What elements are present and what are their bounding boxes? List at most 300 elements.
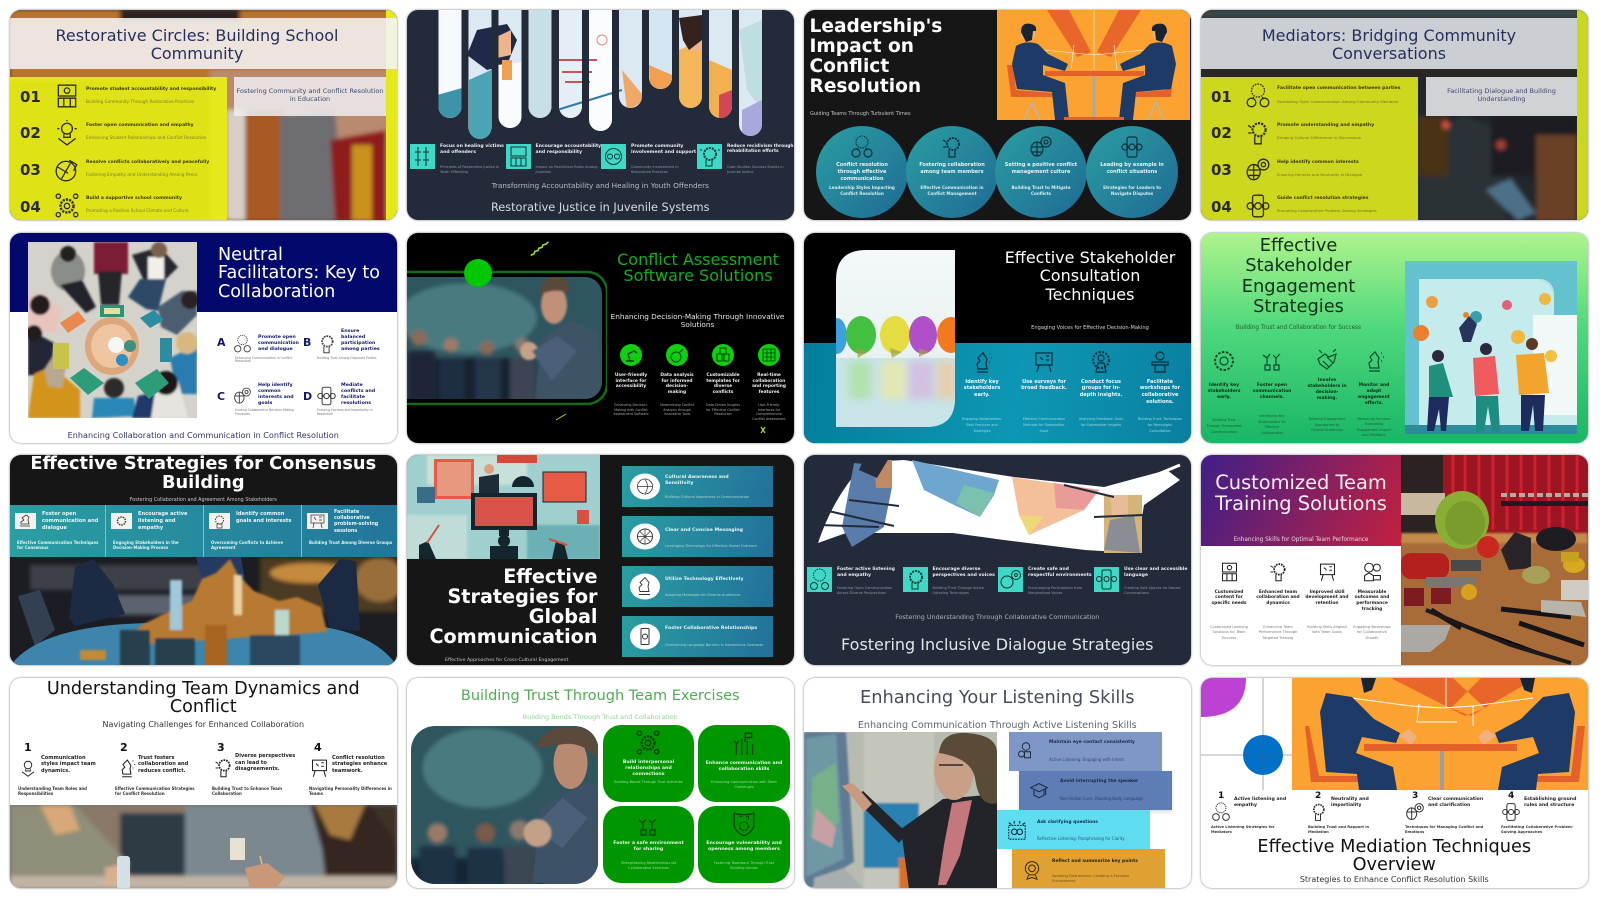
- item C: interests and: [258, 395, 294, 400]
- box: reflect and summarize: [1012, 848, 1165, 888]
- item D: Resolution: [317, 412, 333, 416]
- column: real-time: and reporting: [752, 384, 786, 389]
- item A: communication: [258, 341, 299, 346]
- image: man with phone and digital icons: [1201, 10, 1588, 220]
- icon: plants: [635, 814, 661, 838]
- item 3: [212, 740, 302, 798]
- icon: person with headset: [1017, 738, 1035, 762]
- column: interface: accessibility: [616, 384, 646, 389]
- box: eye contact: [1009, 732, 1162, 770]
- item: problem-solving: [302, 505, 397, 557]
- subtitle: Building Bonds Through Trust and Collaboration: [523, 712, 678, 720]
- column: real-time: Comprehensive: [756, 412, 782, 416]
- card: vulnerability: [698, 806, 790, 882]
- image: negotiators at a table: [997, 10, 1190, 120]
- title: Resolution: [810, 76, 921, 96]
- box: reflect and summarize: Avoiding Distractions: Creating a Focused: [1052, 874, 1129, 878]
- card: cultural awareness: Cultural Awareness and: [665, 474, 729, 480]
- column: surveys: broad feedback.: [1021, 385, 1067, 391]
- card: technology: [622, 566, 773, 607]
- image: colleagues at a meeting table: [10, 804, 397, 888]
- decoration: lime zigzag: [529, 240, 555, 256]
- column: interface: Enhancing Decision-: [614, 403, 648, 407]
- column: content: content for: [1215, 595, 1243, 600]
- column: channels: Collaboration: [1261, 430, 1283, 434]
- card: interpersonal: Build interpersonal: [623, 760, 674, 764]
- item: accountability: Encourage accountability: [536, 144, 601, 149]
- item 04: 04: [1211, 198, 1232, 216]
- image: colourful speech bubbles: [836, 250, 955, 427]
- icon: brain target: [1246, 158, 1270, 180]
- decoration: lime cross: [759, 426, 767, 434]
- item 1: dynamics.: [41, 768, 70, 774]
- item 03: 03: [20, 161, 41, 179]
- icon: green circle bomb: [666, 344, 688, 366]
- column: data: Streamlining Conflict: [660, 403, 694, 407]
- item 1: empathy: [1234, 803, 1257, 808]
- item: safe environments: Encouraging Participation from: [1028, 586, 1082, 590]
- box: clarifying questions: [997, 810, 1150, 848]
- yellow list panel: [1201, 77, 1418, 221]
- card: safe environment: Foster a safe environment: [613, 841, 684, 846]
- item B: participation: [341, 341, 375, 346]
- panel: Listening Skills: [804, 678, 1190, 888]
- item 1: 1: [1218, 790, 1224, 800]
- title: Techniques: [1046, 285, 1134, 304]
- item 2: 2: [1315, 790, 1321, 800]
- column: skills: with Team Goals: [1312, 630, 1342, 634]
- icon: green circle grid: [758, 344, 780, 366]
- item: active listening: Across Diverse Perspectives: [837, 590, 886, 594]
- item 2: Mediation: [1308, 830, 1329, 834]
- title: [810, 16, 942, 96]
- item 02: [20, 120, 206, 146]
- item C: goals: [258, 401, 272, 406]
- subtitle card: [234, 77, 386, 116]
- title: Engagement: [1242, 276, 1355, 296]
- item: open communication: [10, 505, 106, 557]
- item: community: Community Involvement in: [631, 164, 678, 168]
- item B: B: [303, 336, 311, 348]
- icon: brain heads: [851, 135, 873, 158]
- item: open communication: communication and: [42, 518, 98, 524]
- icon: film board: [1006, 818, 1028, 842]
- column: data: Data analysis: [660, 373, 694, 378]
- circle: example: [1086, 126, 1178, 218]
- column: outcomes: tracking: [1362, 607, 1382, 612]
- circle: collaboration: Fostering collaboration: [919, 162, 985, 168]
- column: identify: Communication: [1211, 430, 1237, 434]
- icon: graduation cap: [1027, 780, 1051, 800]
- title: [1201, 838, 1588, 874]
- column: workshops: solutions.: [1146, 399, 1174, 405]
- item 04: Guide conflict resolution strategies: [1277, 196, 1368, 201]
- column: channels: channels.: [1260, 395, 1284, 400]
- column: collaboration: Targeted Training: [1263, 636, 1293, 640]
- teal lower band: [804, 342, 1191, 444]
- column: content: specific needs: [1211, 601, 1247, 606]
- item 4: 4: [1508, 790, 1514, 800]
- item C: Processes: [235, 412, 250, 416]
- item 3: disagreements.: [235, 766, 280, 772]
- title: [1201, 473, 1401, 515]
- item: open communication: dialogue: [42, 525, 67, 531]
- title: Conflict: [810, 56, 889, 76]
- item: active listening: Engaging Stakeholders in the: [113, 540, 179, 544]
- column: focus groups: groups for in-: [1082, 385, 1120, 391]
- title: Building Trust Through Team Exercises: [461, 688, 740, 704]
- item: community: Restorative Practices: [631, 170, 668, 174]
- image: training equipment on a wooden table: [1401, 455, 1588, 666]
- item: accountability: Impact on Recidivism Rates Among: [536, 164, 597, 168]
- card: safe environment: for sharing: [634, 847, 663, 852]
- column: workshops: [1132, 348, 1188, 436]
- title: Strategies for: [447, 584, 598, 608]
- item: common goals: [204, 505, 302, 557]
- item: accountability: Juveniles: [536, 170, 551, 174]
- column: real-time: features: [759, 390, 779, 394]
- item: open communication: Foster open: [42, 511, 76, 517]
- item 2: impartiality: [1331, 803, 1362, 808]
- title: Effective Mediation Techniques: [1257, 837, 1531, 857]
- column: data: decision-: [666, 384, 688, 389]
- column: channels: Identifying Key: [1259, 414, 1285, 418]
- item A: A: [217, 336, 226, 348]
- column: real-time: [746, 344, 792, 438]
- column: channels: communication: [1253, 389, 1291, 394]
- item 4: [309, 740, 397, 798]
- icon: gear head: [1268, 560, 1289, 584]
- subtitle card: Fostering Community and Conflict Resolution: [237, 87, 383, 95]
- subtitle: Fostering Understanding Through Collaborative Communication: [895, 613, 1099, 621]
- icon: speaker podium: [1148, 350, 1172, 374]
- panel: Stakeholder Engagement: [1201, 232, 1588, 442]
- column: outcomes: for Collaborative: [1357, 630, 1387, 634]
- card: interpersonal: connections: [632, 772, 665, 776]
- subtitle: Solutions: [681, 320, 714, 329]
- column: content: Solutions for Team: [1212, 630, 1246, 634]
- item 3: can lead to: [235, 760, 267, 766]
- item 03: Resolve conflicts collaboratively and peacefully: [86, 160, 209, 164]
- title: Community: [151, 44, 243, 63]
- item 02: Enhancing Student Relationships and Conflict Resolution: [86, 136, 206, 141]
- column: data: Analysis through: [663, 408, 691, 412]
- icon: gear head: [321, 335, 334, 354]
- item: open communication: Effective Communication Techniques: [17, 540, 98, 544]
- title: Restorative Justice in Juvenile Systems: [491, 200, 710, 214]
- item 4: 4: [314, 740, 322, 754]
- column: interface: Assessment Software: [613, 412, 649, 416]
- item 2: 2: [120, 740, 128, 754]
- subtitle card: [1426, 77, 1577, 116]
- item C: common: [258, 389, 281, 394]
- item: accessible language: language: [1124, 573, 1148, 578]
- title: Software Solutions: [623, 266, 773, 285]
- item 01: Building Community Through Restorative Practices: [86, 100, 194, 104]
- column: decision-making: Tailoring Engagement: [1309, 417, 1345, 421]
- icon: teal square gear head: [697, 144, 722, 169]
- item 2: Building Trust and Rapport in: [1308, 825, 1369, 829]
- circle: communication: [816, 126, 908, 218]
- title: Understanding Team Dynamics and: [47, 678, 360, 698]
- card: safe environment: Collaborative Exercises: [628, 866, 669, 870]
- item 01: [1211, 83, 1400, 108]
- item 04: [20, 193, 189, 218]
- icon: brain target: [1405, 800, 1425, 822]
- box: avoid interrupting: Avoid interrupting the speaker: [1060, 778, 1138, 784]
- item D: facilitate: [341, 395, 365, 400]
- item 3: and clarification: [1428, 803, 1470, 808]
- panel: Global Communication: [407, 455, 794, 665]
- subtitle: Enhancing Communication Through Active Listening Skills: [858, 720, 1137, 731]
- icon: chess knight: [116, 756, 137, 780]
- item 02: Bridging Cultural Differences in Discussions: [1277, 135, 1361, 140]
- caption: Enhancing Collaboration and Communication in Conflict Resolution: [68, 430, 339, 440]
- column: surveys: Input: [1040, 429, 1048, 433]
- image: illustration in vertical strips: [438, 10, 762, 139]
- item 2: for Conflict Resolution: [115, 790, 165, 796]
- card: interpersonal: [603, 724, 694, 802]
- column: outcomes: outcomes and: [1355, 595, 1389, 600]
- title: [1262, 26, 1516, 63]
- column: outcomes: Growth: [1365, 636, 1378, 640]
- item: active listening: empathy: [138, 525, 163, 531]
- icon: chess on white tile: [15, 513, 36, 529]
- item 4: Establishing ground: [1524, 796, 1576, 802]
- column: interface: Making with Conflict: [614, 408, 648, 412]
- icon: gear head: [1248, 122, 1267, 144]
- title: Neutral: [218, 244, 283, 264]
- panel: Customized Team Training: [1201, 455, 1588, 665]
- icon: teal square exchange: [601, 144, 626, 169]
- column: surveys: Use surveys for: [1022, 378, 1066, 384]
- circle: communication: communication: [840, 176, 884, 182]
- item: common goals: Agreement: [211, 544, 236, 550]
- column: stakeholders: early.: [974, 392, 990, 398]
- item: diverse perspectives: [902, 567, 996, 597]
- item: active listening: [106, 505, 204, 557]
- box: avoid interrupting: Non-Verbal Cues: Reading Body Language: [1060, 796, 1143, 801]
- subtitle: Building Trust and Collaboration for Success: [1236, 324, 1361, 330]
- item 2: Effective Communication Strategies: [115, 786, 195, 790]
- column: focus groups: depth insights.: [1080, 392, 1122, 398]
- item 4: Navigating Personality Differences in: [309, 786, 392, 790]
- column: real-time: User-Friendly: [758, 403, 780, 407]
- circle: communication: Conflict resolution: [836, 162, 888, 168]
- card: communication: Enhance communication and: [706, 761, 782, 766]
- card: vulnerability: Encourage vulnerability and: [706, 841, 782, 846]
- circle: example: Navigate Disputes: [1111, 191, 1153, 196]
- item B: Ensure: [341, 328, 359, 334]
- item 01: 01: [1211, 88, 1232, 106]
- item D: Ensuring Fairness and Impartiality in: [317, 408, 373, 412]
- panel: Stakeholder Consultation: [804, 232, 1190, 442]
- item 4: Solving Approaches: [1501, 830, 1542, 834]
- item A: Enhancing Communication in Conflict: [235, 356, 292, 360]
- column: templates: [700, 344, 746, 438]
- item: rehabilitation: Reduce recidivism through: [727, 144, 794, 149]
- item 4: Teams: [309, 790, 323, 796]
- circle: collaboration: Conflict Management: [927, 191, 977, 196]
- item: safe environments: [998, 567, 1091, 597]
- header band: [10, 18, 397, 69]
- card: interpersonal: relationships and: [625, 766, 672, 770]
- panel: Restorative Justice: [407, 10, 794, 220]
- item B: balanced: [341, 335, 365, 340]
- item A: and dialogue: [258, 347, 293, 352]
- item C: Help identify: [258, 382, 293, 388]
- item 2: collaboration and: [138, 761, 188, 767]
- column: surveys: Methods for Stakeholder: [1023, 423, 1065, 427]
- circle: communication: Conflict Resolution: [840, 191, 884, 196]
- column: interface: [608, 344, 654, 438]
- item B: [303, 328, 380, 360]
- column: stakeholders: [956, 348, 1008, 436]
- subtitle: Transforming Accountability and Healing in Youth Offenders: [492, 180, 709, 190]
- item 4: Facilitating Collaborative Problem-: [1501, 825, 1573, 829]
- column: decision-making: decision-: [1316, 390, 1338, 395]
- icon: teal square board: [506, 144, 531, 169]
- column: skills: development and: [1305, 595, 1349, 600]
- circle: example: Strategies for Leaders to: [1103, 185, 1161, 190]
- circle: culture: [995, 126, 1087, 218]
- item: active listening: and empathy: [837, 573, 871, 578]
- icon: two heads: [1246, 83, 1270, 108]
- image: teacher at interactive display: [804, 732, 997, 888]
- circle: collaboration: among team members: [920, 169, 984, 175]
- column: decision-making: [1304, 348, 1350, 440]
- icon: two heads: [1211, 800, 1231, 822]
- column: collaboration: Enhancing Team: [1263, 625, 1293, 629]
- item: problem-solving: collaborative: [334, 515, 370, 521]
- item 02: 02: [1211, 124, 1232, 142]
- title: Conflict: [170, 696, 237, 716]
- item 4: rules and structure: [1524, 803, 1574, 808]
- item: problem-solving: sessions: [334, 528, 357, 534]
- column: data: [654, 344, 700, 438]
- navy header band: [10, 232, 397, 312]
- title: Overview: [1353, 855, 1436, 875]
- item: problem-solving: problem-solving: [334, 521, 378, 527]
- column: identify: early.: [1217, 395, 1231, 400]
- icon: person at desk: [1362, 560, 1383, 584]
- title: Global: [529, 604, 598, 628]
- title: Enhancing Your Listening Skills: [860, 687, 1135, 708]
- icon: gear head: [942, 137, 960, 158]
- item 04: Promoting a Positive School Climate and Culture: [86, 209, 189, 214]
- column: real-time: Conflict Assessment: [752, 417, 786, 421]
- column: decision-making: stakeholders in: [1307, 384, 1347, 389]
- column: channels: Stakeholders for: [1258, 420, 1286, 424]
- item 02: Foster open communication and empathy: [86, 123, 194, 128]
- column: outcomes: Measurable: [1358, 590, 1386, 594]
- column: channels: Effective: [1265, 425, 1279, 429]
- column: content: Customized Learning: [1210, 625, 1248, 629]
- box: clarifying questions: Ask clarifying questions: [1037, 820, 1098, 824]
- column: templates: Customizable: [706, 373, 740, 378]
- item: accountability: [506, 144, 601, 174]
- title: Fostering Inclusive Dialogue Strategies: [841, 634, 1153, 654]
- title: Consultation: [1040, 266, 1140, 285]
- item: active listening: Foster active listening: [837, 567, 895, 572]
- item B: Building Trust Among Disparate Parties: [317, 356, 376, 360]
- subtitle: Enhancing Skills for Optimal Team Performance: [1234, 536, 1368, 542]
- subtitle: Guiding Teams Through Turbulent Times: [810, 110, 911, 116]
- item: accessible language: Creating Safe Spaces for Honest: [1124, 586, 1181, 590]
- title: [1002, 248, 1178, 305]
- item 2: [115, 740, 205, 798]
- title: Conversations: [1332, 44, 1446, 63]
- panel: Team Dynamics: [10, 678, 396, 888]
- column: content: Customized: [1215, 590, 1243, 594]
- item: diverse perspectives: Encourage diverse: [932, 567, 981, 572]
- column: identify: [1201, 348, 1247, 440]
- column: workshops: Building Trust: Techniques: [1138, 417, 1182, 421]
- item 3: Emotions: [1405, 830, 1424, 834]
- circle: collaboration: Effective Communication in: [920, 185, 984, 190]
- item: common goals: Overcoming Conflicts to Achieve: [211, 540, 283, 544]
- item: rehabilitation: Case Studies: Success Stories in: [727, 164, 784, 168]
- column: skills: Improved skill: [1309, 590, 1345, 594]
- item: healing victims: [410, 144, 504, 174]
- item: open communication: for Consensus: [17, 544, 48, 550]
- item: healing victims: Focus on healing victims: [440, 144, 504, 149]
- column: stakeholders: Strategies: [973, 429, 991, 433]
- column: content: Success: [1222, 636, 1236, 640]
- column: focus groups: [1073, 348, 1129, 436]
- item 3: Collaboration: [212, 790, 242, 796]
- item: community: involvement and support: [631, 150, 696, 155]
- item 1: Active listening and: [1234, 796, 1286, 802]
- item 1: styles impact team: [41, 761, 96, 767]
- column: monitor: Monitor and: [1359, 382, 1389, 388]
- item 4: [1501, 790, 1587, 838]
- image: negotiators at a table, close crop: [1292, 678, 1588, 790]
- title: Effective: [1260, 234, 1337, 256]
- column: collaboration: dynamics: [1266, 601, 1290, 606]
- item C: Guiding Collaborative Decision-Making: [235, 408, 294, 412]
- card: clear messaging: [622, 516, 773, 557]
- icon: brain target: [233, 384, 252, 408]
- card: safe environment: Strengthening Relationships via: [621, 861, 676, 865]
- column: monitor: efforts.: [1365, 401, 1383, 406]
- card: clear messaging: Leveraging Technology for Effective Global Outreach: [665, 544, 757, 548]
- image: executives over a model city: [10, 557, 397, 666]
- card: vulnerability: Building Games: [730, 866, 758, 870]
- item: accessible language: [1094, 567, 1187, 597]
- icon: presentation board: [1317, 560, 1338, 584]
- item: diverse perspectives: perspectives and voices: [932, 573, 995, 578]
- item 02: Promote understanding and empathy: [1277, 123, 1374, 128]
- box: reflect and summarize: Reflect and summarize key points: [1052, 858, 1138, 864]
- title: Effective: [503, 564, 598, 588]
- icon: gear head on white tile: [209, 513, 230, 529]
- column: skills: retention: [1315, 601, 1339, 606]
- column: collaboration: collaboration and: [1256, 595, 1300, 600]
- card: relationships: Overcoming Language Barriers in Interactions Overseas: [665, 643, 763, 647]
- image: man pointing in green frame: [407, 259, 607, 405]
- circle: communication: Leadership Styles Impacting: [829, 185, 895, 190]
- item: active listening: Fostering Open Communication: [837, 586, 892, 590]
- title: Communication: [429, 624, 598, 648]
- column: workshops: Consultation: [1149, 429, 1171, 433]
- column: channels: [1249, 348, 1295, 440]
- item 3: Techniques for Managing Conflict and: [1405, 825, 1483, 829]
- title: Stakeholder: [1245, 255, 1352, 276]
- icon: phone in white circle: [630, 623, 660, 650]
- column: data: making: [668, 390, 686, 394]
- panel: Conflict Assessment Software: [407, 232, 794, 442]
